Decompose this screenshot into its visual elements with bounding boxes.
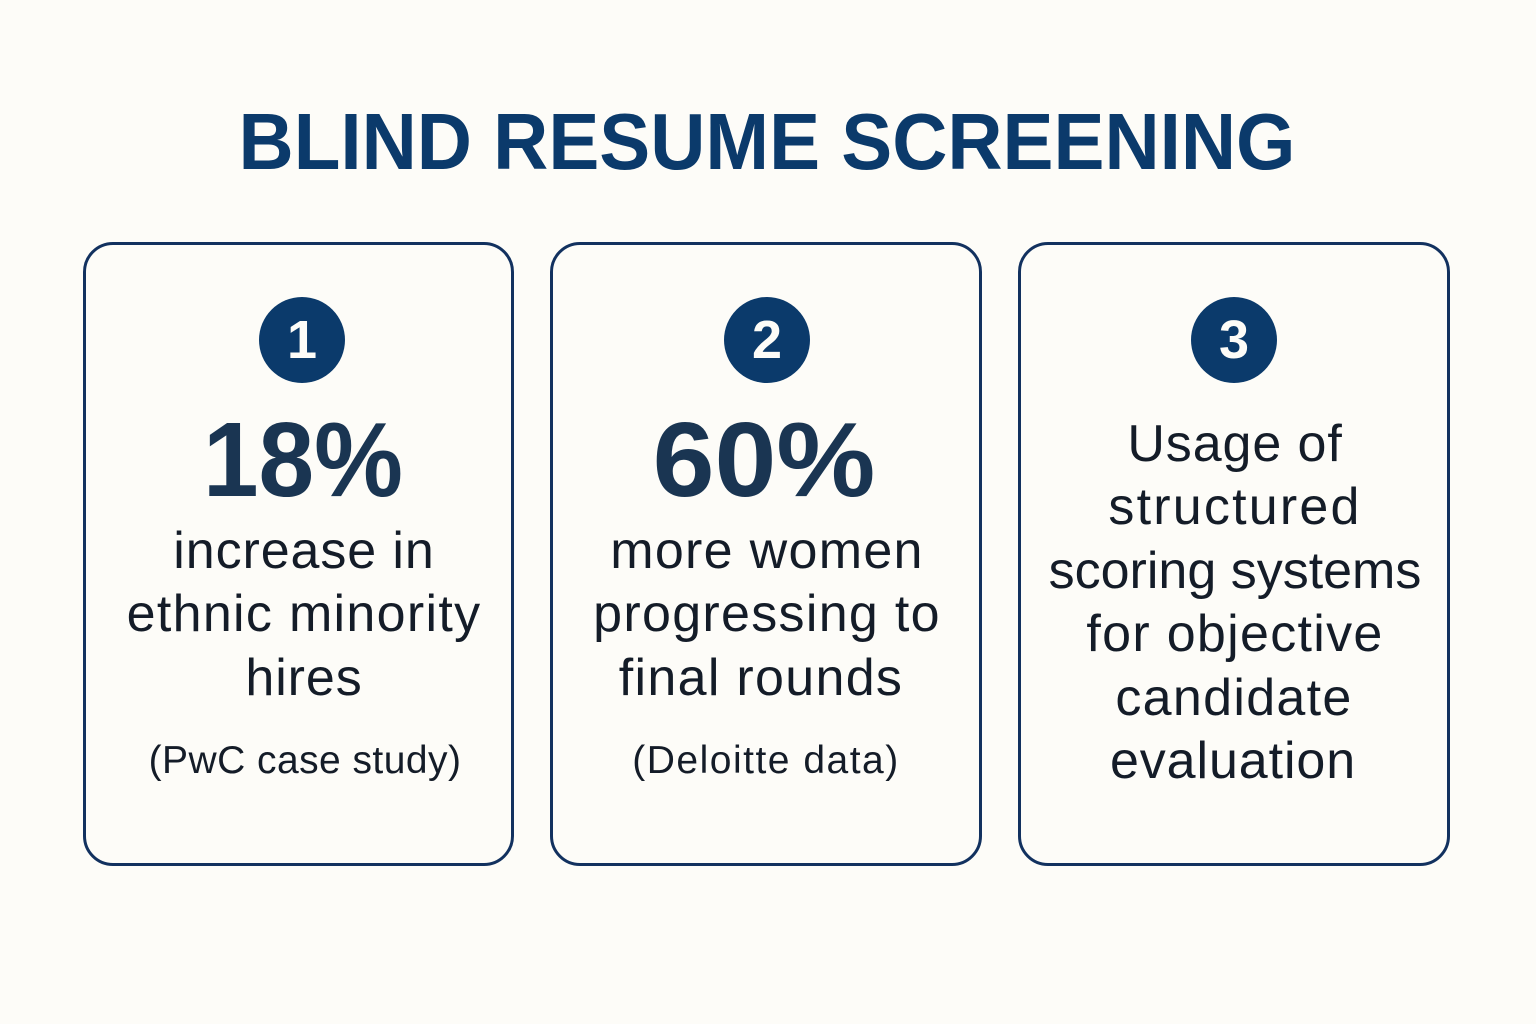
icon: number 3 badge xyxy=(1191,297,1277,383)
panel: card 2 xyxy=(550,242,982,866)
text: card 3 description: evaluation xyxy=(1110,732,1356,790)
text: card 3 description xyxy=(1049,415,1421,790)
icon: number 2 badge: 2 xyxy=(752,310,782,370)
icon: number 3 badge: 3 xyxy=(1219,310,1249,370)
text: card 3 description: structured xyxy=(1108,478,1362,536)
icon: number 1 badge xyxy=(259,297,345,383)
stat: 18%: 18% xyxy=(203,401,403,519)
text: card 2 description xyxy=(593,522,941,707)
panel: card 3 xyxy=(1018,242,1450,866)
text: card 3 description: for objective xyxy=(1086,605,1384,663)
text: card 2 description: final rounds xyxy=(619,649,903,707)
panel: card 1 xyxy=(83,242,514,866)
text: card 1 description xyxy=(127,522,481,707)
stat: 60%: 60% xyxy=(653,401,875,519)
text: card 2 description: more women xyxy=(610,522,924,580)
text: card 1 source: (PwC case study) xyxy=(149,739,461,782)
text: card 2 description: progressing to xyxy=(593,585,941,643)
text: card 3 description: scoring systems xyxy=(1049,542,1421,600)
text: card 1 description: ethnic minority xyxy=(127,585,481,643)
icon: number 2 badge xyxy=(724,297,810,383)
text: card 1 description: hires xyxy=(245,649,363,707)
text: card 1 description: increase in xyxy=(173,522,435,580)
text: card 3 description: Usage of xyxy=(1127,415,1343,473)
text: card 3 description: candidate xyxy=(1115,669,1353,727)
text: card 2 source: (Deloitte data) xyxy=(632,739,900,782)
icon: number 1 badge: 1 xyxy=(287,310,317,370)
title: BLIND RESUME SCREENING xyxy=(239,97,1295,186)
